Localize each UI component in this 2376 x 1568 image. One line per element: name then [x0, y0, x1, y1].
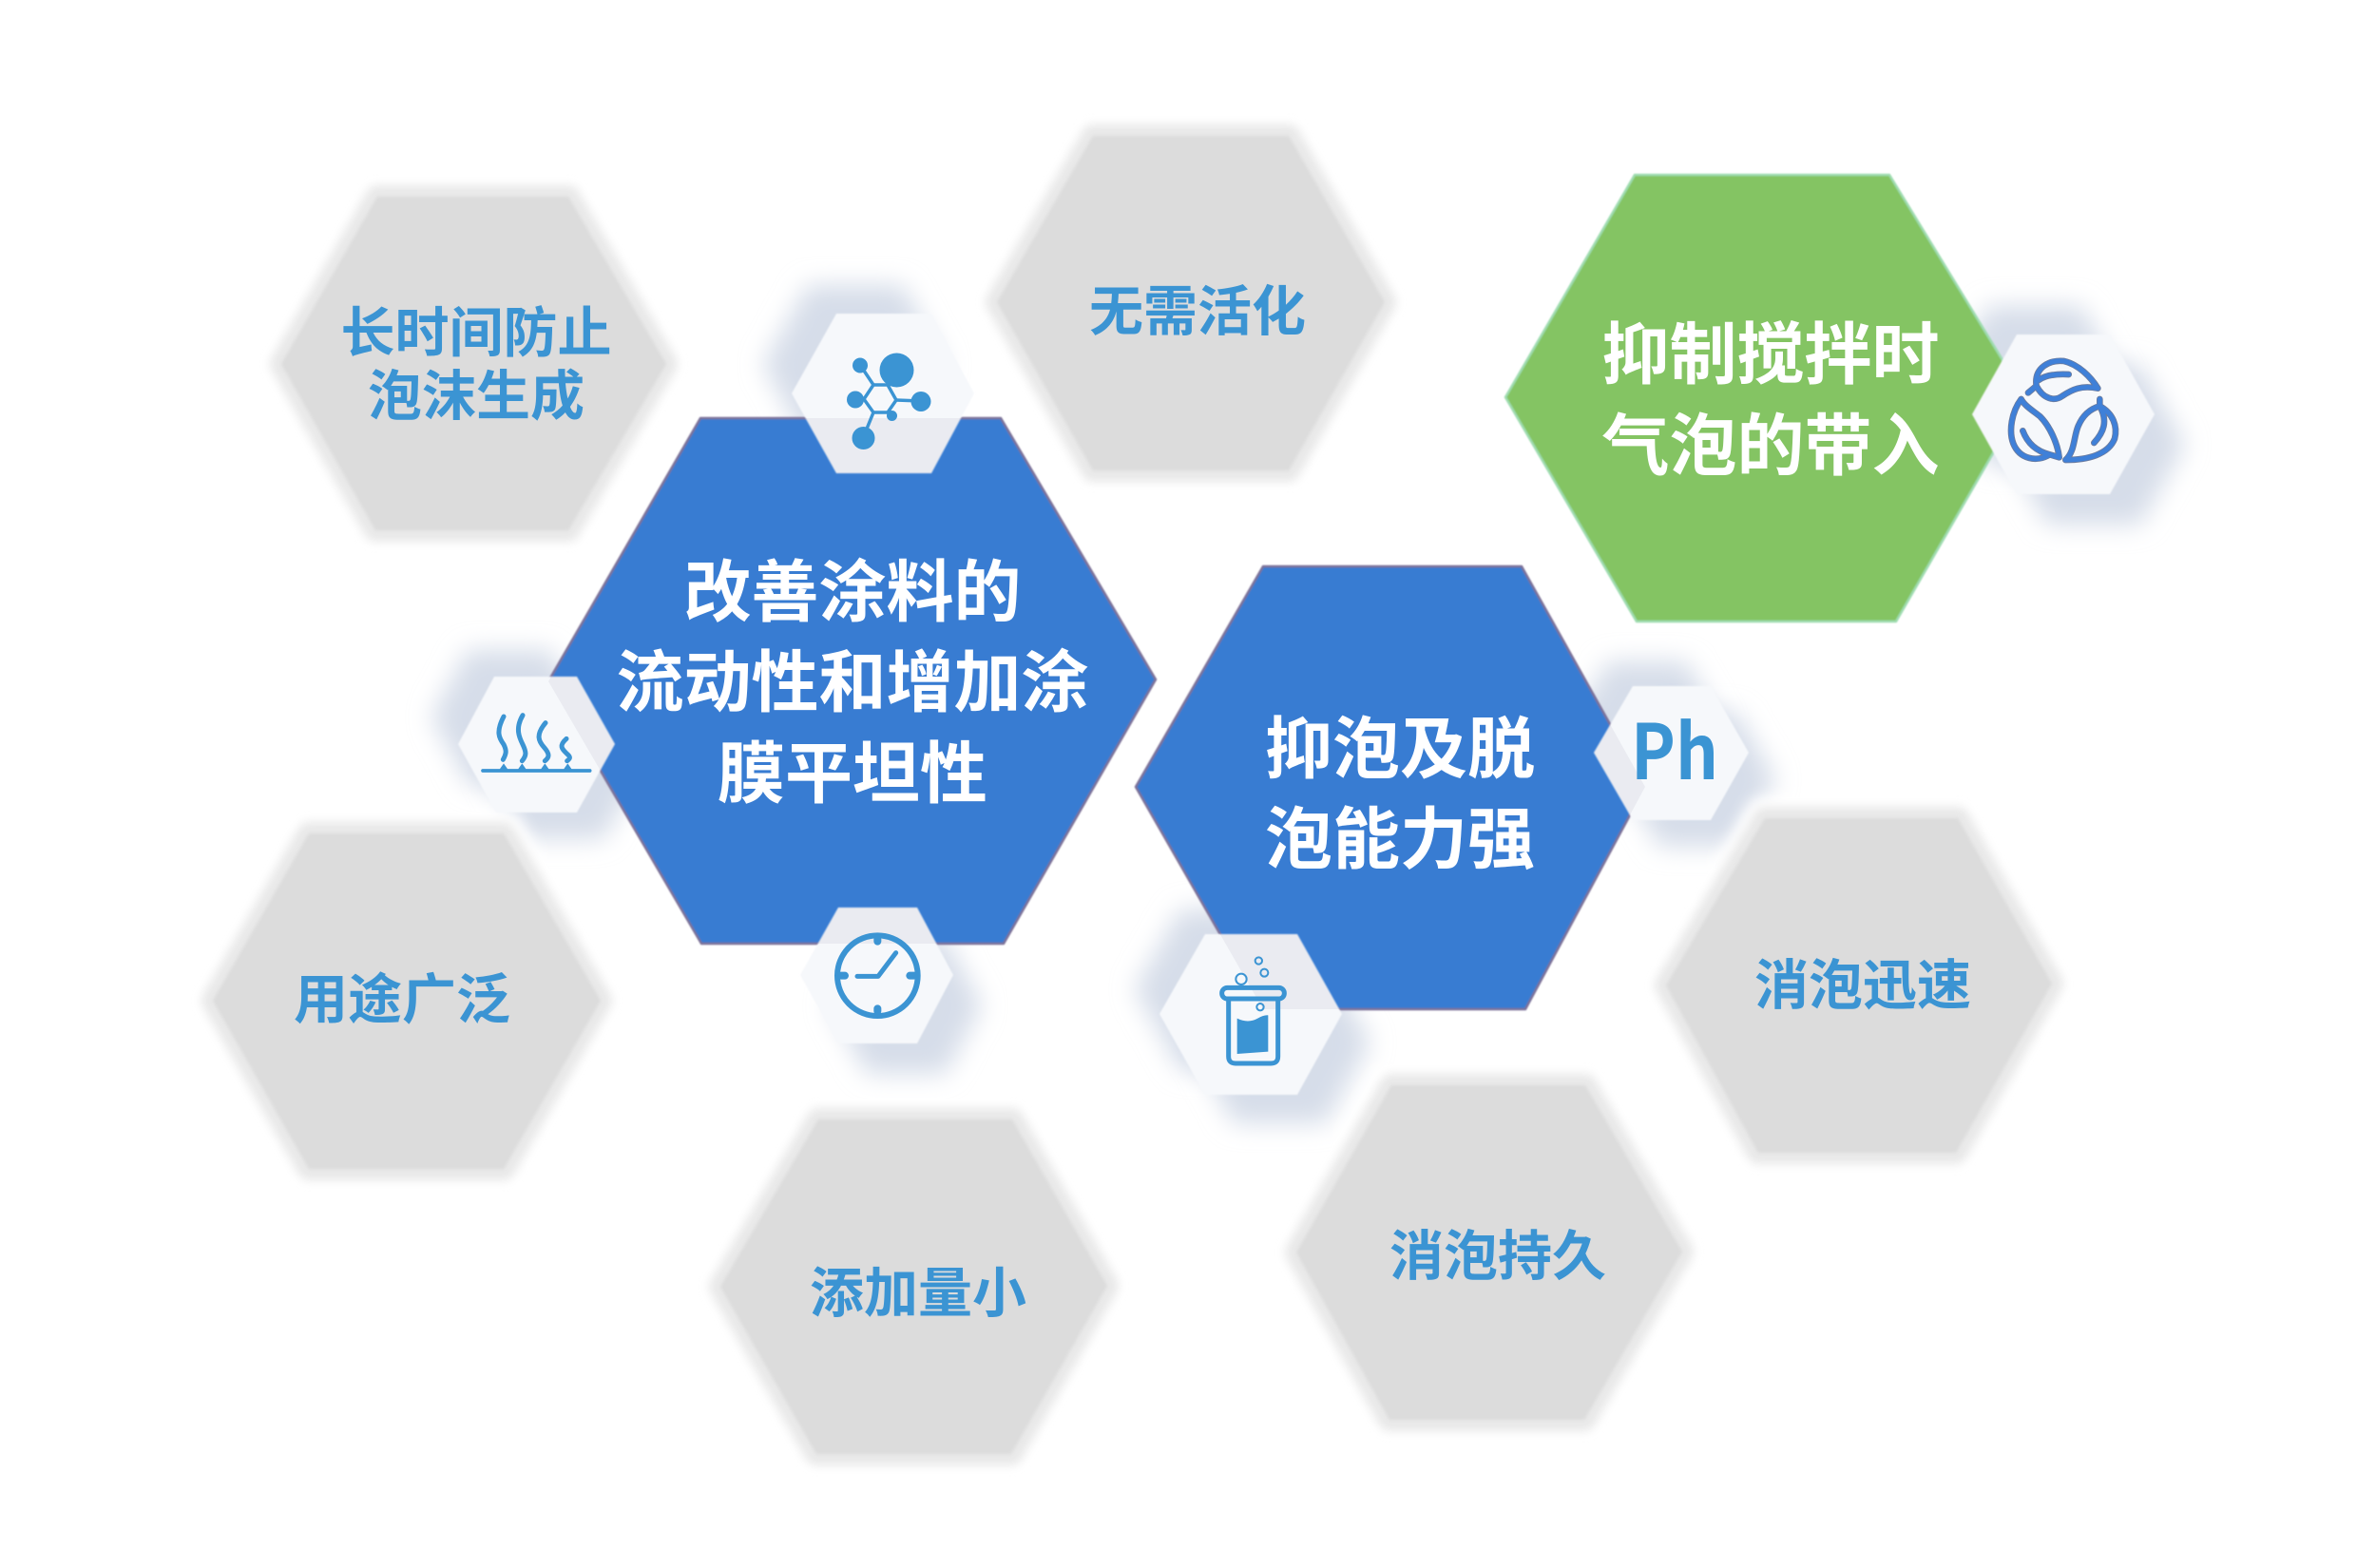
- panel: no activation needed: [997, 136, 1385, 470]
- panel: wide application: [213, 833, 601, 1169]
- icon: rising steam: [458, 676, 616, 813]
- panel: long-lasting foam prevention: 长时间防止: [340, 303, 612, 364]
- panel: small dosage: 添加量小: [810, 1264, 1026, 1325]
- panel: wide application: 用途广泛: [294, 969, 510, 1030]
- icon: molecule: [792, 314, 973, 474]
- panel: improves flow and leveling: 流动性和增加涂: [616, 646, 1089, 721]
- panel: fast defoaming: [1666, 818, 2052, 1153]
- panel: improves flow and leveling: [548, 418, 1156, 944]
- panel: suppresses air from stirring: 抑制搅拌时: [1601, 318, 1940, 393]
- panel: fast defoaming: 消泡迅速: [1754, 956, 1971, 1017]
- panel: improves flow and leveling: 改善涂料的: [683, 556, 1022, 631]
- panel: long-lasting foam prevention: 泡沫生成: [368, 367, 584, 428]
- panel: defoaming and deaeration ability: 泡能力强: [1265, 803, 1535, 878]
- panel: long-lasting defoaming: [1296, 1085, 1682, 1420]
- icon: clock: [802, 907, 953, 1043]
- icon: recycling leaves: [1972, 335, 2155, 494]
- panel: small dosage: [720, 1119, 1107, 1454]
- panel: defoaming and deaeration ability: [1136, 566, 1645, 1009]
- icon: Ph label: [1593, 686, 1749, 821]
- panel: improves flow and leveling: 膜平坦性: [718, 737, 987, 813]
- icon: beaker with bubbles: [1159, 933, 1342, 1095]
- icon: Ph label: Ph: [1631, 692, 1718, 802]
- panel: long-lasting foam prevention: [281, 197, 666, 530]
- panel: defoaming and deaeration ability: 抑泡及脱: [1265, 713, 1535, 788]
- panel: suppresses air from stirring: [1505, 175, 2025, 621]
- panel: suppresses air from stirring: 气泡的带入: [1601, 410, 1940, 485]
- panel: no activation needed: 无需活化: [1089, 281, 1306, 342]
- panel: long-lasting defoaming: 消泡持久: [1389, 1226, 1606, 1287]
